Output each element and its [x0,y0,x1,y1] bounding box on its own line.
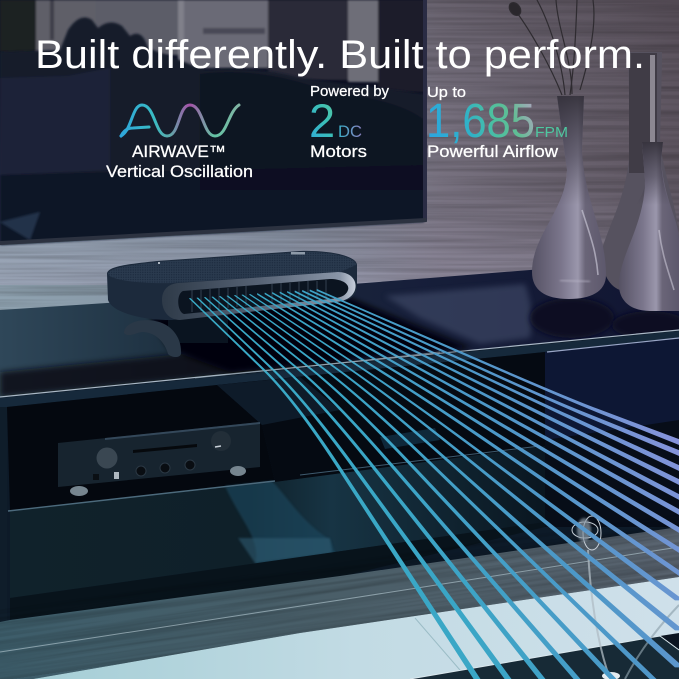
motors label: Motors [310,142,367,161]
feature: dc motors [309,84,390,161]
stems [507,0,594,95]
fpm label: FPM [535,124,568,141]
icon: airwave wave logo [121,105,239,136]
powerful airflow label: Powerful Airflow [427,142,559,161]
reflection: sofa [0,18,424,245]
volume knob [96,448,118,468]
upper cabinet band [0,331,679,408]
up to label: Up to [427,85,466,101]
vases and dried stems [507,0,679,311]
number 2: 2 [309,94,335,147]
oscillation label: Vertical Oscillation [106,162,253,181]
title: Built differently. Built to perform. [35,33,645,77]
vent fins [192,280,326,312]
lower glossy door [10,446,545,598]
air purifier device [107,251,470,372]
right door [545,338,679,525]
amp compartment interior [7,385,275,511]
vent opening [178,279,348,314]
feet [70,486,88,496]
airwave label: AIRWAVE™ [132,143,226,161]
powered by label: Powered by [310,84,390,100]
pedestal [168,313,228,343]
shelf edge reflection across lines [195,352,440,378]
shadow [150,296,470,372]
airflow lines [190,290,679,679]
cabinet [0,330,679,622]
mesh top [108,252,356,283]
tone knobs [136,460,195,476]
back vase [602,52,679,290]
reflection: windows [0,0,424,92]
amplifier [58,422,260,496]
front right vase [619,142,679,311]
wall panel [0,0,679,330]
body [107,251,357,320]
front left vase [532,96,606,299]
vent bezel [162,272,356,320]
feature: airflow [426,85,568,161]
shelf edge highlights [0,330,679,397]
dc label: DC [338,123,362,141]
feature: airwave vertical oscillation [106,105,253,181]
input knob [211,431,231,451]
number 1,685: 1,685 [426,95,535,148]
dandelion decoration [572,516,679,679]
tv screen with room reflection [0,0,427,245]
shelf top [0,258,679,397]
floor [0,511,679,679]
stand [124,320,181,357]
